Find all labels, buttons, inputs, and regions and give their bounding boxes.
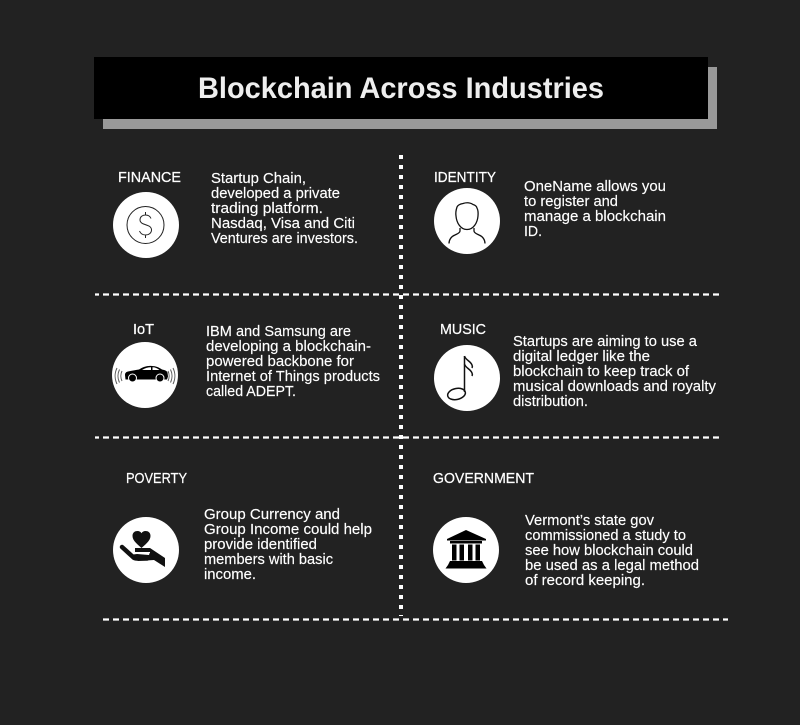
text: government: of record keeping. bbox=[525, 573, 645, 589]
heading: iot: IoT bbox=[133, 321, 154, 338]
heading: finance: FINANCE bbox=[118, 169, 181, 186]
text: government: commissioned a study to bbox=[525, 528, 686, 544]
text: iot: Internet of Things products bbox=[206, 369, 380, 385]
text: music: musical downloads and royalty bbox=[513, 379, 717, 395]
text: finance: Startup Chain, bbox=[211, 171, 306, 187]
panel: iot bbox=[112, 321, 380, 408]
text: iot: called ADEPT. bbox=[206, 384, 296, 400]
icon: hand holding heart bbox=[113, 517, 179, 583]
title banner bbox=[94, 57, 717, 129]
text: identity: manage a blockchain bbox=[524, 209, 666, 225]
icon: person bbox=[434, 188, 500, 254]
text: government: see how blockchain could bbox=[525, 543, 693, 559]
text: iot: IBM and Samsung are bbox=[206, 324, 351, 340]
text: poverty: income. bbox=[204, 567, 256, 583]
text: finance bbox=[211, 171, 358, 247]
text: identity: OneName allows you bbox=[524, 179, 666, 195]
text: music: digital ledger like the bbox=[513, 349, 650, 365]
text: government: be used as a legal method bbox=[525, 558, 699, 574]
icon: music note bbox=[434, 345, 500, 411]
text: poverty: provide identified bbox=[204, 537, 317, 553]
text: finance: Ventures are investors. bbox=[211, 231, 358, 247]
heading: poverty: POVERTY bbox=[126, 470, 187, 487]
heading: government: GOVERNMENT bbox=[433, 470, 534, 487]
text: iot: powered backbone for bbox=[206, 354, 354, 370]
text: finance: Nasdaq, Visa and Citi bbox=[211, 216, 355, 232]
text: iot: developing a blockchain- bbox=[206, 339, 371, 355]
panel: music bbox=[434, 321, 717, 411]
text: poverty bbox=[204, 507, 372, 583]
text: poverty: Group Income could help bbox=[204, 522, 372, 538]
panel: poverty bbox=[113, 470, 372, 583]
text: government bbox=[525, 513, 699, 589]
icon: dollar coin bbox=[113, 192, 179, 258]
text: finance: trading platform. bbox=[211, 201, 323, 217]
text: poverty: Group Currency and bbox=[204, 507, 340, 523]
text: identity: to register and bbox=[524, 194, 618, 210]
heading: identity: IDENTITY bbox=[434, 169, 496, 186]
text: identity: ID. bbox=[524, 224, 542, 240]
text: government: Vermont’s state gov bbox=[525, 513, 655, 529]
text: music: distribution. bbox=[513, 394, 588, 410]
text: poverty: members with basic bbox=[204, 552, 333, 568]
text: iot bbox=[206, 324, 380, 400]
text: finance: developed a private bbox=[211, 186, 340, 202]
text: music: Startups are aiming to use a bbox=[513, 334, 698, 350]
text: identity bbox=[524, 179, 666, 240]
text: music: blockchain to keep track of bbox=[513, 364, 690, 380]
icon: connected car bbox=[112, 342, 178, 408]
heading: music: MUSIC bbox=[440, 321, 486, 338]
text: music bbox=[513, 334, 717, 410]
panel: government bbox=[433, 470, 699, 589]
icon: government building bbox=[433, 517, 499, 583]
title: Blockchain Across Industries bbox=[198, 72, 604, 105]
panel: identity bbox=[434, 169, 666, 254]
panel: finance bbox=[113, 169, 358, 258]
